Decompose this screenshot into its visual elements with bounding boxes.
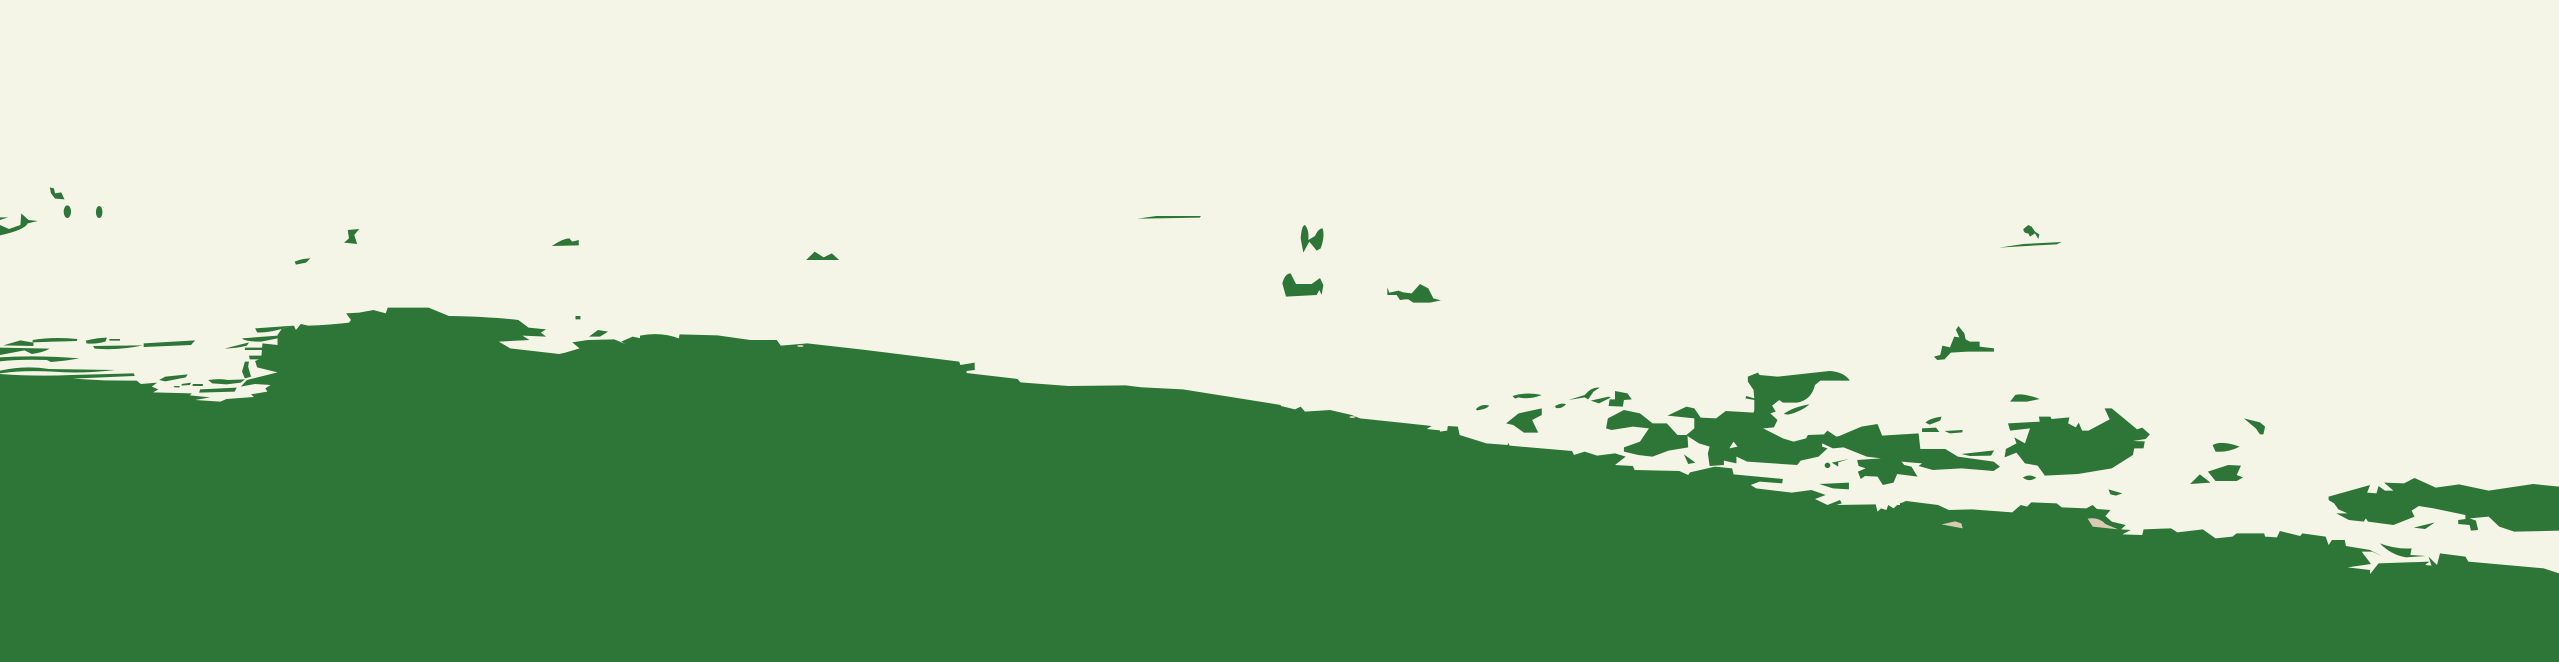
- left section: hill and brush streaks: [0, 187, 641, 662]
- right-centre section: fragmented coastline: [1440, 371, 2000, 662]
- centre section: sloping hill ridge: [640, 216, 1281, 662]
- middle section: ridge with floating islands: [1270, 225, 1441, 662]
- right section: shoreline and eastern island: [1900, 326, 2559, 662]
- small sliver island: [1999, 225, 2062, 248]
